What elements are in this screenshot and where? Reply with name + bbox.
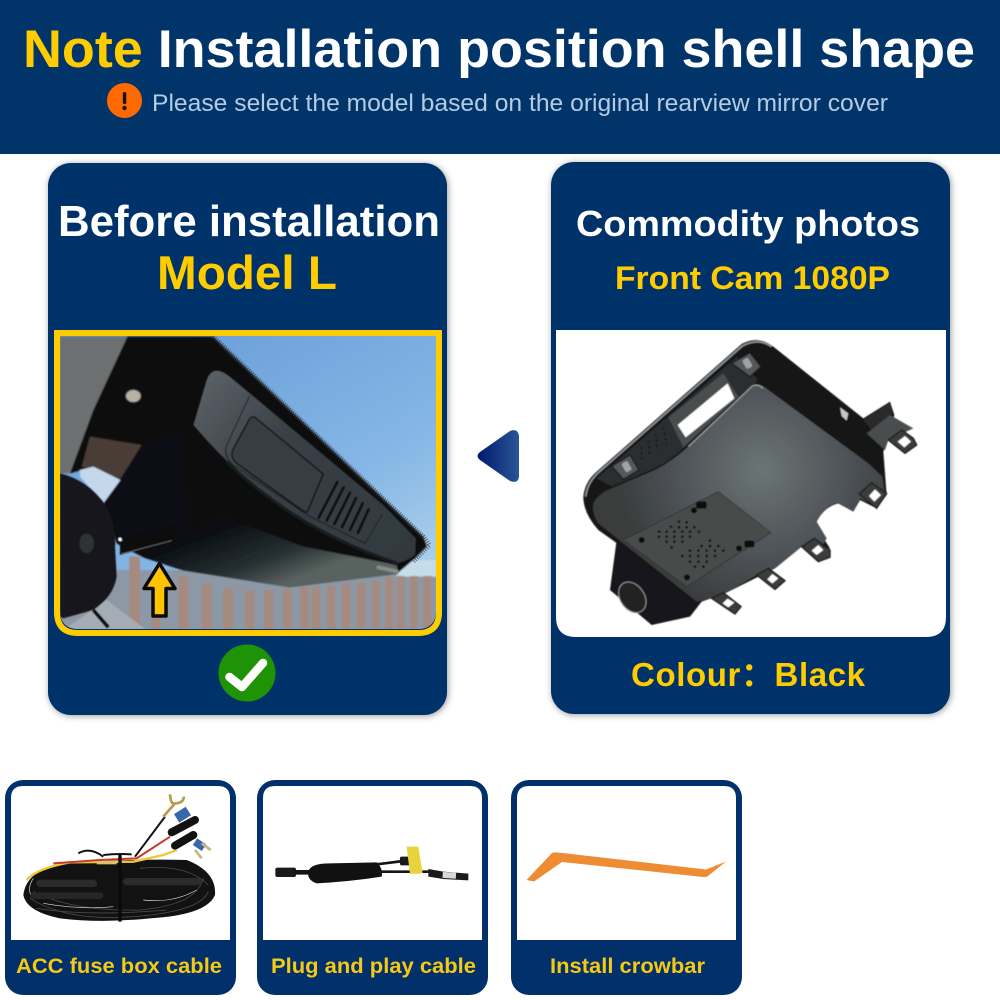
header banner (0, 0, 1000, 154)
accessory: ACC fuse box cable (5, 780, 236, 995)
icon: green check (218, 644, 276, 702)
label: ACC fuse box cable (16, 954, 222, 978)
title: Note Installation position shell shape (23, 20, 975, 79)
arrow: left pointing triangle (478, 430, 519, 482)
heading: commodity photos: Commodity photos (576, 203, 920, 244)
label: colour: Colour：Black (631, 656, 866, 693)
crowbar image (526, 852, 726, 882)
tab holes (723, 436, 911, 607)
label: Install crowbar (550, 954, 706, 978)
cable image (23, 794, 215, 922)
heading: model L: Model L (157, 246, 337, 299)
icon: warning (107, 83, 142, 118)
window slot (668, 373, 738, 447)
panel: commodity photos (551, 162, 950, 714)
module plate (623, 492, 771, 587)
photo: installed mirror cover (57, 333, 439, 633)
accessory: install crowbar (511, 780, 742, 995)
photo: camera shell (556, 330, 946, 637)
vent ticks (642, 427, 667, 462)
cable image (275, 847, 468, 883)
label: Plug and play cable (271, 954, 476, 978)
subtitle: Please select the model based on the original rearview mirror cover (152, 90, 888, 117)
shell face (593, 385, 885, 602)
panel: before installation (48, 163, 447, 715)
arrow: yellow up arrow (144, 564, 175, 616)
photo frame (57, 333, 439, 633)
subheading: front cam: Front Cam 1080P (615, 260, 890, 296)
camera body (610, 540, 702, 625)
shell wall (583, 340, 894, 603)
heading: before installation: Before installation (58, 197, 440, 246)
clips (732, 353, 761, 377)
mounting tabs (712, 430, 917, 614)
accessory: plug and play cable (257, 780, 488, 995)
